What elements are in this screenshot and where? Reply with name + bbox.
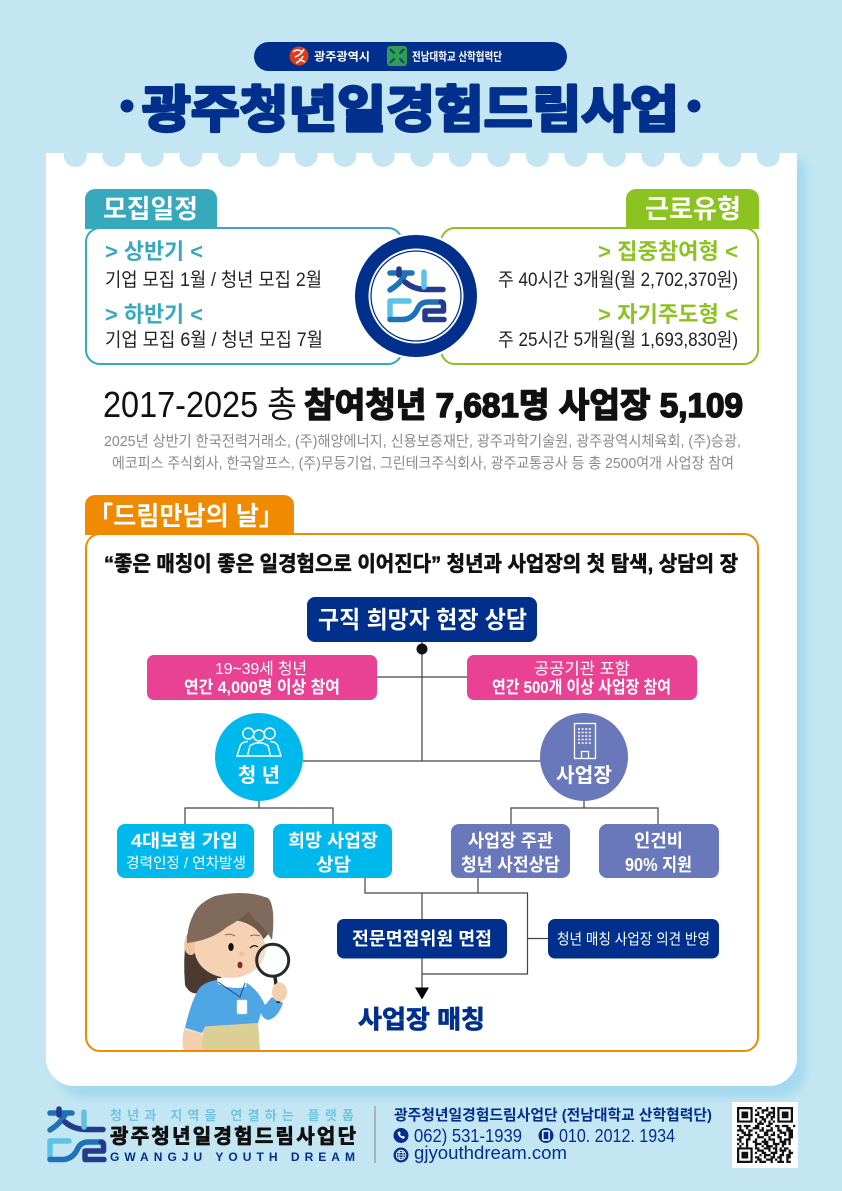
- quote heading: “좋은 매칭이 좋은 일경험으로 이어진다” 청년과 사업장의 첫 탐색, 상담의 장: [104, 553, 738, 576]
- box: youth participants: [147, 655, 377, 700]
- circle: company: 사업장: [556, 764, 612, 787]
- title: 광주청년일경험드림사업: [142, 82, 679, 138]
- text: first half: > 상반기 <: [105, 239, 203, 264]
- box: company participants: [467, 655, 697, 700]
- text: company matching: 사업장 매칭: [358, 1006, 485, 1034]
- text: intensive type: [498, 239, 738, 291]
- center circular logo: [352, 232, 480, 360]
- text: second half: > 하반기 <: [105, 302, 203, 327]
- header pill: organizers: [254, 42, 567, 71]
- panel: dream meeting day: [85, 495, 758, 1051]
- box: company participants: 공공기관 포함: [534, 660, 630, 678]
- tab: work type: [626, 189, 759, 229]
- circle: company: [540, 713, 628, 801]
- icon: people: [237, 728, 281, 756]
- text: first half: [105, 239, 322, 291]
- text: self-directed type: [498, 302, 738, 351]
- text: footer english name: GWANGJU YOUTH DREAM: [110, 1150, 355, 1164]
- participating companies text: 에코피스 주식회사, 한국알프스, (주)무등기업, 그린테크주식회사, 광주교통공사 등 총 2500여개 사업장 참여: [112, 455, 734, 472]
- box: expert interview: 전문면접위원 면접: [352, 929, 492, 949]
- text: footer program name: 광주청년일경험드림사업단: [110, 1125, 356, 1148]
- box: preferred company consult: 상담: [316, 855, 351, 875]
- footer: contact info: gjyouthdream.com: [414, 1142, 567, 1163]
- footer: contact info: 010. 2012. 1934: [559, 1125, 675, 1146]
- white paper card: [46, 144, 806, 1098]
- flow connector lines: [185, 642, 658, 990]
- icon: globe: [394, 1148, 408, 1162]
- box: company pre-consult: [451, 824, 570, 878]
- text: Gwangju city: 광주광역시: [314, 50, 370, 64]
- box: opinions reflected: [548, 919, 719, 958]
- text: self-directed type: > 자기주도형 <: [598, 302, 738, 327]
- icon: Gwangju city logo: [290, 46, 308, 66]
- participating companies text: [104, 433, 741, 472]
- text: first half: 기업 모집 1월 / 청년 모집 2월: [105, 269, 322, 291]
- footer: contact info: [394, 1107, 712, 1163]
- character: woman with magnifying glass: [182, 893, 289, 1050]
- icon: phone: [394, 1128, 408, 1143]
- box: labor cost support: [599, 824, 719, 878]
- box: preferred company consult: [273, 824, 392, 878]
- text: Chonnam university: 전남대학교 산학협력단: [412, 50, 502, 64]
- box: company participants: 연간 500개 이상 사업장 참여: [492, 678, 671, 697]
- stats headline: [103, 384, 743, 425]
- box: opinions reflected: 청년 매칭 사업장 의견 반영: [557, 931, 710, 948]
- text: second half: [105, 302, 323, 351]
- box: company pre-consult: 청년 사전상담: [461, 855, 560, 875]
- text: intensive type: > 집중참여형 <: [598, 239, 738, 264]
- footer: contact info: 062) 531-1939: [414, 1125, 522, 1146]
- connector dot: [416, 644, 428, 654]
- box: expert interview: [337, 919, 507, 958]
- tab: dream meeting day: 「드림만남의 날」: [88, 501, 284, 531]
- icon: building: [574, 724, 596, 758]
- stats headline: 참여청년 7,681명 사업장 5,109: [304, 387, 743, 425]
- text: self-directed type: 주 25시간 5개월(월 1,693,830원): [498, 329, 738, 351]
- box: preferred company consult: 희망 사업장: [288, 831, 378, 851]
- participating companies text: 2025년 상반기 한국전력거래소, (주)해양에너지, 신용보증재단, 광주과학기술원, 광주광역시체육회, (주)승광,: [104, 433, 741, 450]
- footer: contact info: 광주청년일경험드림사업단 (전남대학교 산학협력단): [394, 1107, 712, 1124]
- box: on-site consultation: 구직 희망자 현장 상담: [318, 607, 527, 634]
- box: on-site consultation: [307, 597, 537, 642]
- circle: youth: 청 년: [238, 764, 280, 787]
- arrow: [415, 988, 429, 1000]
- icon: mobile: [538, 1128, 554, 1143]
- QR code: [732, 1102, 798, 1168]
- tab: work type: 근로유형: [645, 194, 741, 224]
- footer divider: [374, 1106, 376, 1163]
- panel: recruitment schedule: [85, 189, 402, 364]
- circle: youth: [215, 713, 303, 801]
- box: company pre-consult: 사업장 주관: [468, 831, 553, 851]
- box: youth participants: 19~39세 청년: [215, 660, 307, 678]
- box: labor cost support: 90% 지원: [625, 855, 692, 875]
- box: youth participants: 연간 4,000명 이상 참여: [184, 678, 340, 697]
- box: insurance: 4대보험 가입: [131, 831, 238, 851]
- panel: work type: [441, 189, 759, 364]
- box: labor cost support: 인건비: [634, 831, 683, 851]
- tab: recruitment schedule: 모집일정: [103, 194, 198, 224]
- footer: logo: [50, 1108, 356, 1164]
- text: intensive type: 주 40시간 3개월(월 2,702,370원): [498, 269, 738, 291]
- stats headline: 2017-2025 총: [103, 384, 297, 425]
- box: insurance: 경력인정 / 연차발생: [126, 855, 246, 872]
- box: insurance: [117, 824, 254, 878]
- text: second half: 기업 모집 6월 / 청년 모집 7월: [105, 329, 323, 351]
- text: footer slogan: 청년과 지역을 연결하는 플랫폼: [110, 1108, 354, 1123]
- tab: recruitment schedule: [85, 189, 217, 229]
- icon: Chonnam university logo: [387, 46, 407, 66]
